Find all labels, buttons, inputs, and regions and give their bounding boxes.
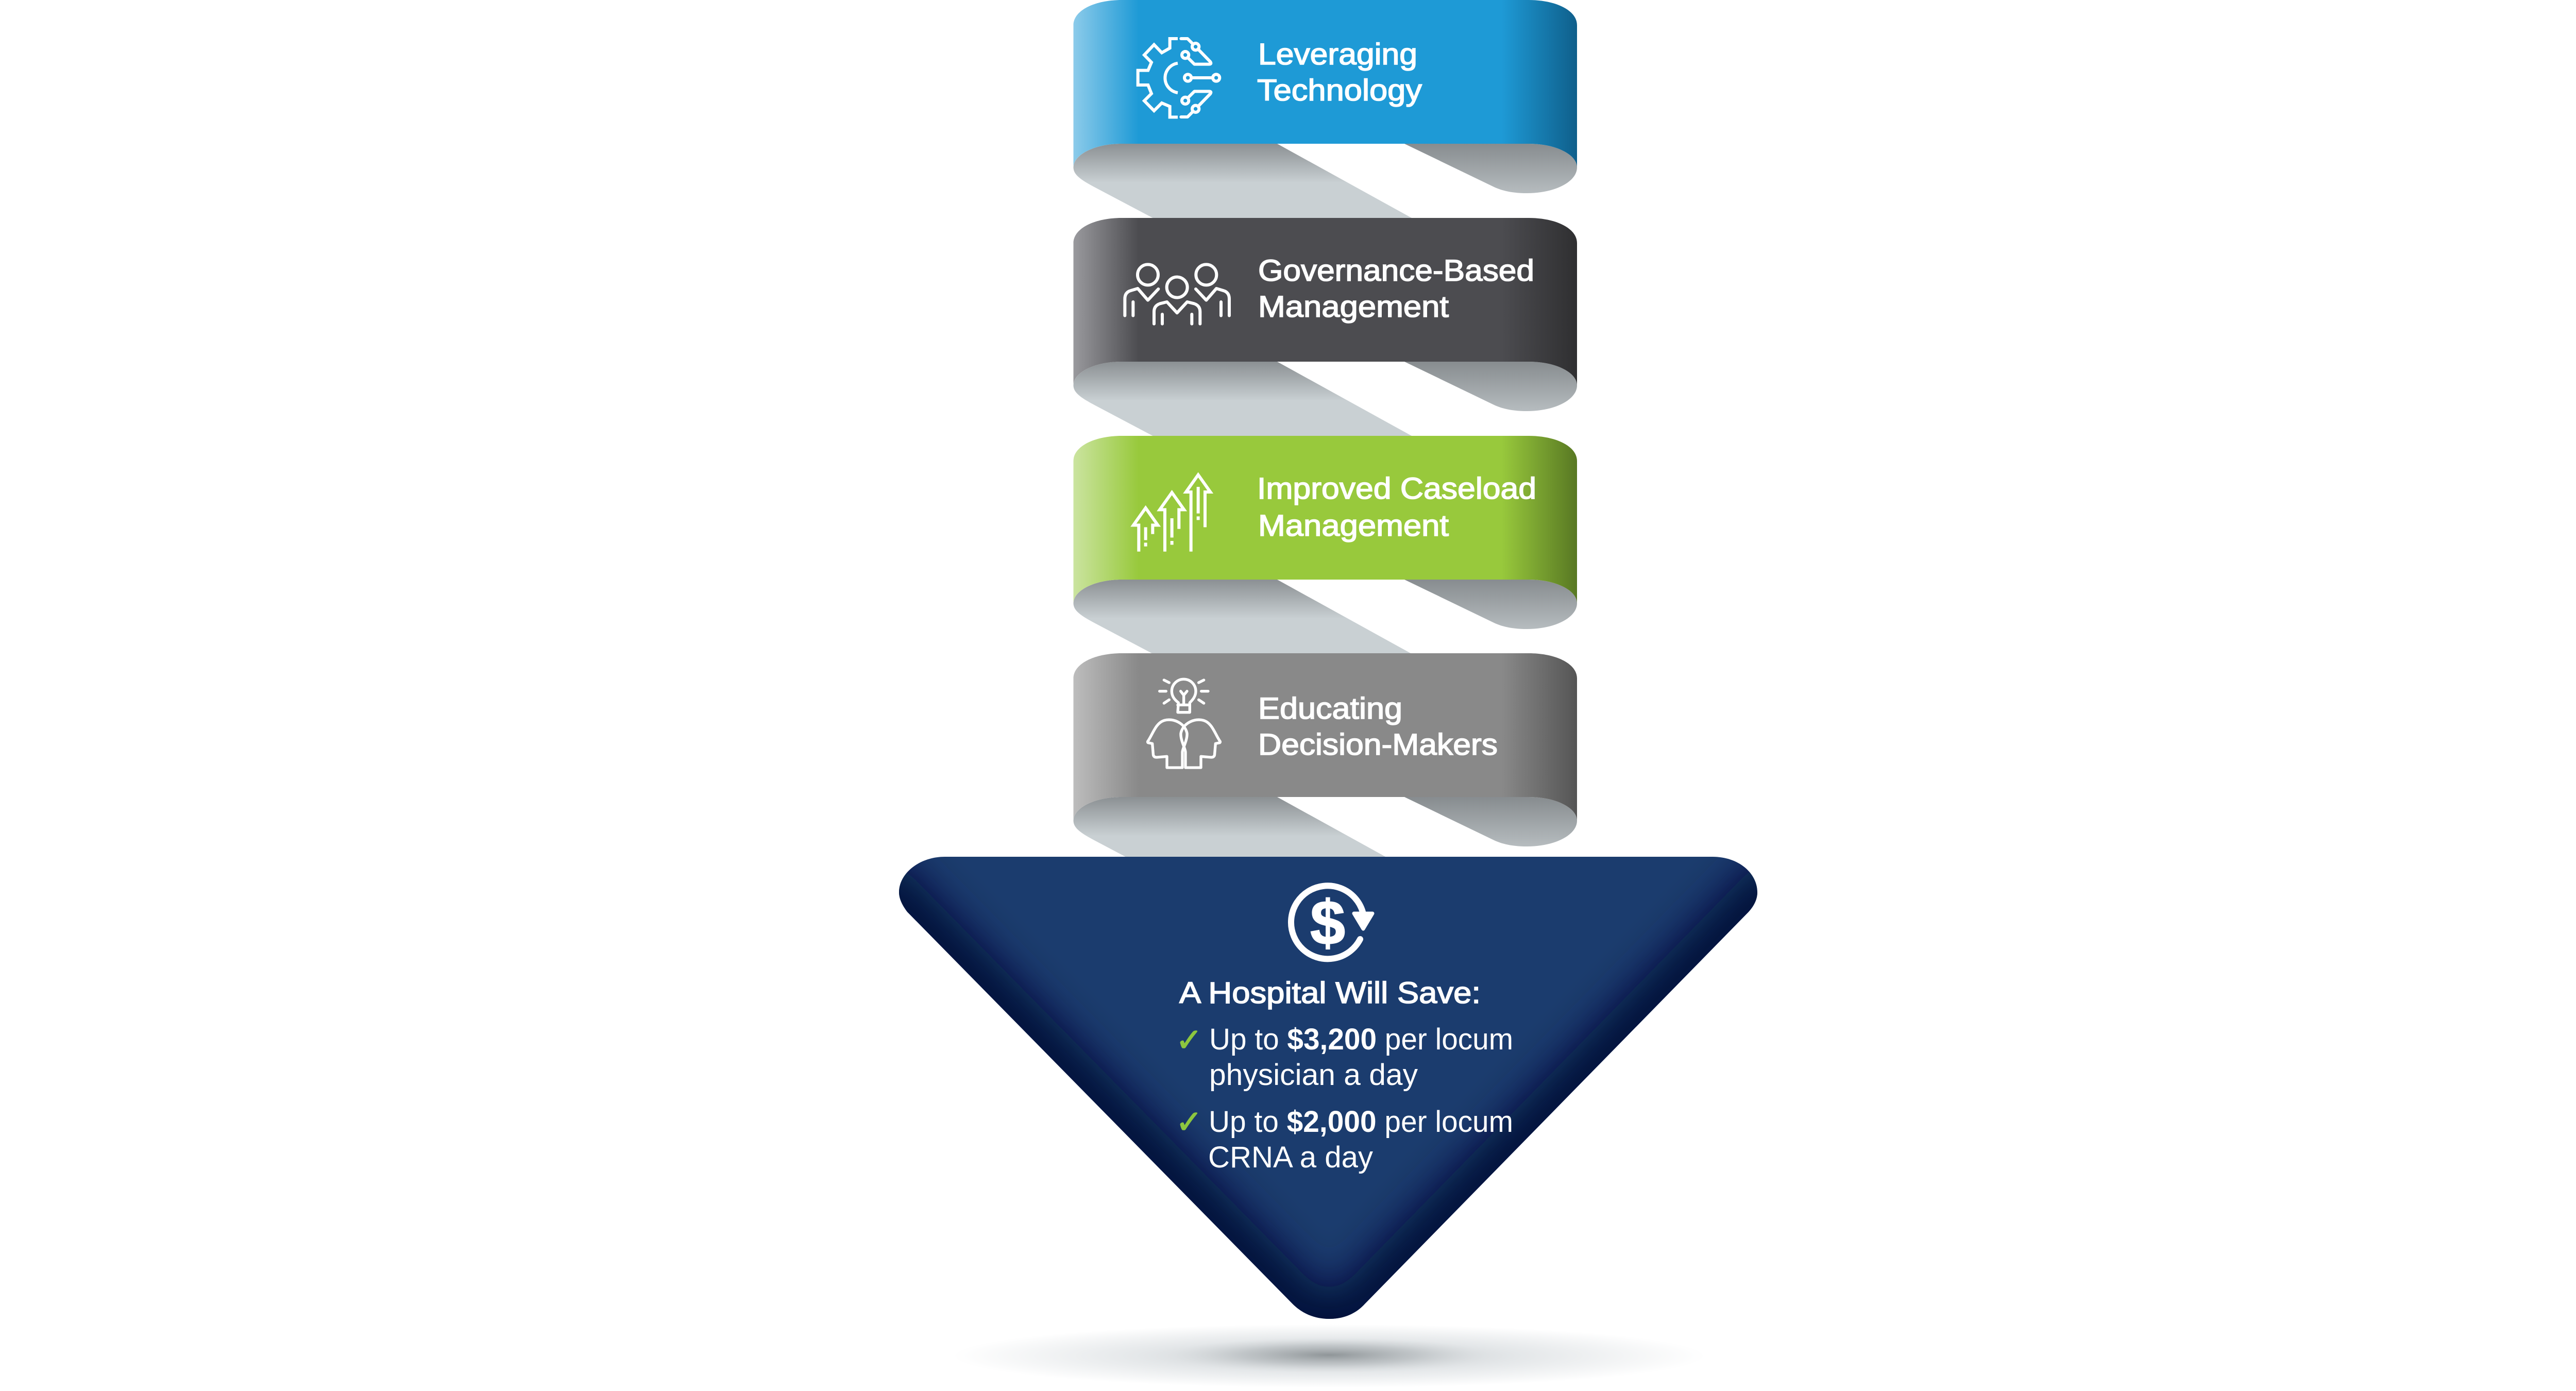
panel: step 3 Improved Caseload Management ribbon: [1074, 436, 1577, 654]
heading: Improved Caseload Management: Improved Caseload: [1257, 472, 1536, 505]
text block: physician savings: [1176, 1021, 1513, 1092]
heading: Educating Decision-Makers: [1258, 692, 1498, 761]
icon: rising arrows: [1133, 475, 1210, 552]
ribbon band: blue: [1074, 0, 1577, 167]
heading: Governance-Based Management: [1258, 254, 1534, 324]
text block: physician savings: physician a day: [1209, 1058, 1418, 1092]
heading: Leveraging Technology: Leveraging: [1258, 38, 1417, 71]
icon: gear with circuit: [1138, 39, 1219, 117]
ribbon band: green: [1074, 436, 1577, 603]
icon: green check mark: ✓: [1176, 1103, 1202, 1141]
icon: green check mark: ✓: [1176, 1021, 1202, 1059]
panel: step 1 Leveraging Technology ribbon: [1074, 0, 1577, 218]
ribbon band: dark grey: [1074, 218, 1577, 385]
ribbon underside shadow: [1074, 362, 1577, 436]
icon: dollar with circular arrow: [1291, 886, 1372, 959]
drop shadow under arrow: [953, 1324, 1705, 1388]
heading: Improved Caseload Management: Management: [1258, 509, 1449, 542]
heading: Governance-Based Management: Management: [1258, 290, 1449, 324]
ribbon underside shadow: [1074, 144, 1577, 218]
ribbon underside shadow: [1074, 580, 1577, 654]
heading: Leveraging Technology: [1257, 38, 1422, 107]
heading: Educating Decision-Makers: Decision-Makers: [1258, 728, 1498, 761]
heading: Leveraging Technology: Technology: [1257, 74, 1422, 107]
text block: physician savings: Up to $3,200 per locum: [1209, 1023, 1513, 1056]
icon: dollar with circular arrow: $: [1310, 888, 1345, 958]
panel: navy downward arrow: [899, 857, 1757, 1319]
heading: Governance-Based Management: Governance-Based: [1258, 254, 1534, 287]
ribbon underside shadow: [1074, 797, 1577, 871]
heading: A Hospital Will Save: A Hospital Will Save:: [1179, 976, 1481, 1010]
icon: three people: [1125, 264, 1229, 324]
panel: step 2 Governance-Based Management ribbon: [1074, 218, 1577, 436]
text block: CRNA savings: CRNA a day: [1208, 1141, 1373, 1174]
heading: Educating Decision-Makers: Educating: [1258, 692, 1402, 725]
heading: Improved Caseload Management: [1257, 472, 1536, 542]
ribbon band: mid grey: [1074, 653, 1577, 821]
text block: CRNA savings: Up to $2,000 per locum: [1209, 1105, 1513, 1139]
icon: two heads and light bulb: [1147, 679, 1220, 768]
text block: CRNA savings: [1176, 1103, 1513, 1174]
panel: step 4 Educating Decision-Makers ribbon: [1074, 653, 1577, 871]
